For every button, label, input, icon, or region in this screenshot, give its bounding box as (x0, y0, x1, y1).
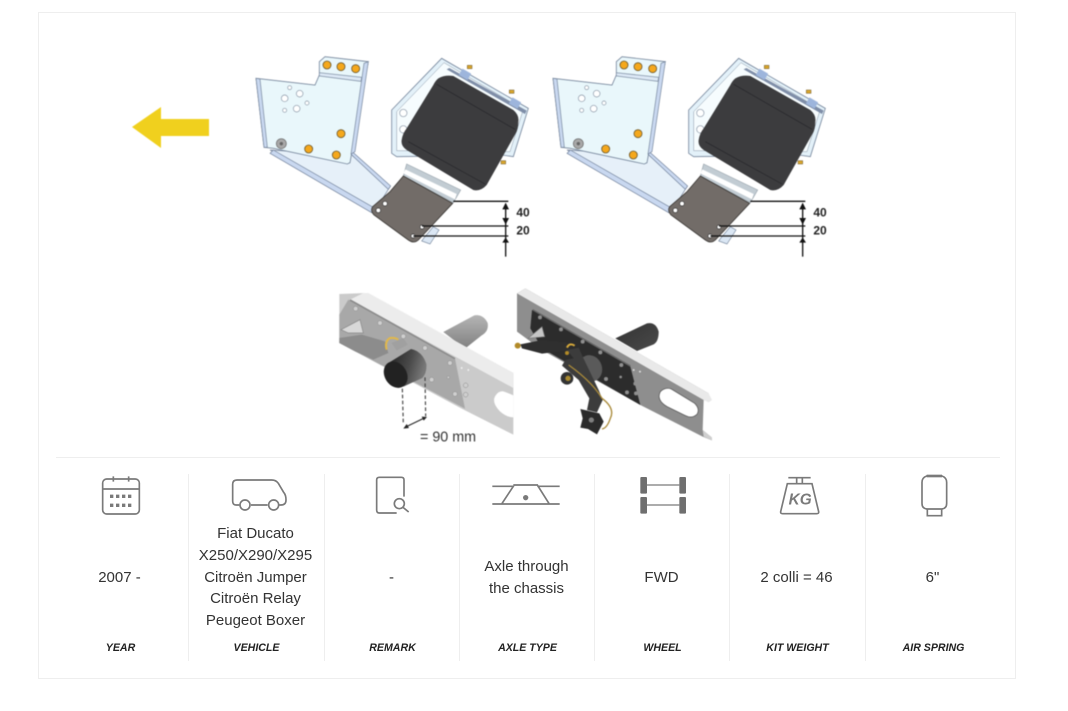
diagram: right bracket with 40 and 20 dimensions (553, 57, 827, 257)
diagram: chassis rail with fitted suspension arm (515, 288, 712, 440)
value: vehicle: Citroën Jumper (204, 569, 307, 586)
value: axle type: the chassis (489, 580, 564, 596)
value: vehicle: Peugeot Boxer (206, 612, 305, 629)
divider (56, 457, 1000, 458)
value: air spring: 6" (926, 569, 939, 586)
column: axle type (459, 474, 595, 661)
label: year: YEAR (106, 642, 135, 654)
diagram: left bracket with 40 and 20 dimensions: 20 (516, 224, 530, 238)
diagram: chassis rail with axle tube and 90 mm clearance (339, 293, 513, 445)
label: wheel: WHEEL (643, 642, 682, 654)
icon: kg weight: KG (789, 491, 812, 508)
icon: kg weight (780, 476, 820, 514)
icon: document search (376, 476, 410, 514)
icon: axle through chassis (492, 484, 560, 505)
column: air spring (865, 474, 1001, 661)
label: kit weight: KIT WEIGHT (766, 642, 829, 654)
value: vehicle: Fiat Ducato (217, 525, 294, 542)
value: axle type: Axle through (484, 558, 569, 575)
icon: van (232, 479, 287, 511)
value: year: 2007 - (98, 569, 141, 586)
label: air spring: AIR SPRING (903, 642, 964, 654)
column: vehicle (188, 474, 324, 661)
icon: wheel layout (640, 477, 686, 514)
diagram: right bracket with 40 and 20 dimensions: 20 (813, 224, 827, 238)
column: wheel (594, 474, 730, 661)
diagram: right bracket with 40 and 20 dimensions: 40 (813, 206, 827, 220)
column: remark (324, 474, 460, 661)
value: vehicle (199, 525, 312, 629)
value: axle type (484, 558, 569, 596)
label: remark: REMARK (369, 642, 416, 654)
diagram: chassis rail with axle tube and 90 mm clearance: = 90 mm (420, 429, 476, 445)
diagram: left bracket with 40 and 20 dimensions (256, 57, 530, 257)
value: vehicle: X250/X290/X295 (199, 547, 312, 564)
label: axle type: AXLE TYPE (498, 642, 557, 654)
label: vehicle: VEHICLE (234, 642, 279, 654)
value: vehicle: Citroën Relay (210, 590, 301, 607)
icon: calendar (102, 476, 140, 515)
arrow: direction of travel (132, 107, 209, 148)
value: kit weight: 2 colli = 46 (760, 569, 833, 586)
icon: air spring (921, 474, 948, 516)
value: remark: - (389, 569, 394, 586)
column: year (98, 476, 141, 654)
value: wheel: FWD (644, 569, 679, 586)
column: kit weight (729, 474, 865, 661)
diagram: left bracket with 40 and 20 dimensions: 40 (516, 206, 530, 220)
